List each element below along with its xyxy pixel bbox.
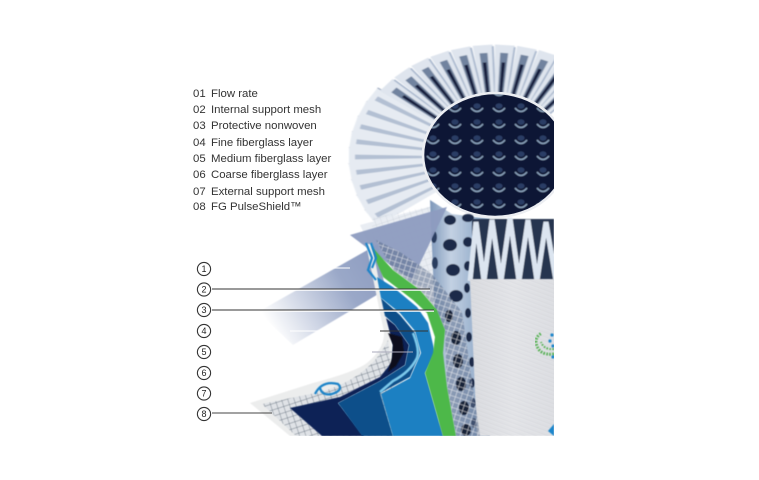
lower pleats: [470, 218, 556, 281]
legend row 08: FG PulseShield™: [211, 201, 302, 213]
callout 8: [197, 407, 211, 421]
blue swirls: [315, 243, 376, 394]
legend row 02: 02: [193, 104, 206, 116]
leader line 5: [372, 351, 413, 353]
callout 6: [197, 366, 211, 380]
legend row 05: 05: [193, 153, 206, 165]
logo on wrap: [536, 333, 555, 436]
callout 6: 6: [201, 368, 207, 378]
legend row 04: 04: [193, 137, 206, 149]
inner opening: [423, 93, 567, 217]
callout numbers and leader lines: [197, 262, 434, 421]
leader line 2: [212, 289, 430, 290]
callout 1: 1: [201, 264, 207, 274]
mesh panel behind arrow: [360, 205, 436, 285]
callout 7: [197, 387, 211, 400]
callout 2: [197, 283, 211, 296]
legend row 05: Medium fiberglass layer: [211, 153, 331, 165]
legend row 01: 01: [193, 88, 206, 100]
legend row 03: Protective nonwoven: [211, 120, 317, 132]
green layer: [372, 247, 456, 436]
leader line 8: [212, 412, 272, 414]
dark blue layer: [338, 298, 420, 436]
callout 4: 4: [201, 326, 207, 336]
legend row 06: 06: [193, 169, 206, 181]
black shadow band: [388, 333, 404, 372]
legend row 07: 07: [193, 186, 206, 198]
flow arrow: [258, 207, 447, 345]
bottom fabric with mesh: [250, 244, 402, 436]
callout 4: [197, 324, 211, 338]
mid blue layer: [377, 277, 443, 436]
callout 5: [197, 345, 211, 359]
legend row 08: 08: [193, 201, 206, 213]
pleats top view: [348, 44, 554, 221]
light stripe: [380, 333, 418, 392]
filter cartridge: [250, 44, 554, 436]
leader line 1: [320, 267, 350, 269]
callout 3: [197, 303, 211, 317]
legend row 02: Internal support mesh: [211, 104, 321, 116]
callout 1: [197, 262, 211, 276]
perforated tube: [430, 200, 490, 436]
callout 3: 3: [201, 305, 207, 315]
external mesh strip: [376, 240, 480, 436]
outer wrap: [470, 279, 556, 436]
legend row 01: Flow rate: [211, 88, 258, 100]
navy layer: [290, 318, 409, 436]
callout 2: 2: [201, 285, 207, 295]
callout 5: 5: [201, 347, 207, 357]
legend row 04: Fine fiberglass layer: [211, 137, 313, 149]
legend row 03: 03: [193, 120, 206, 132]
legend: [193, 88, 332, 213]
callout 8: 8: [201, 409, 207, 419]
leader line 4: [290, 330, 428, 332]
legend row 06: Coarse fiberglass layer: [211, 169, 328, 181]
callout 7: 7: [201, 389, 207, 399]
leader line 3: [212, 310, 434, 311]
legend row 07: External support mesh: [211, 186, 325, 198]
